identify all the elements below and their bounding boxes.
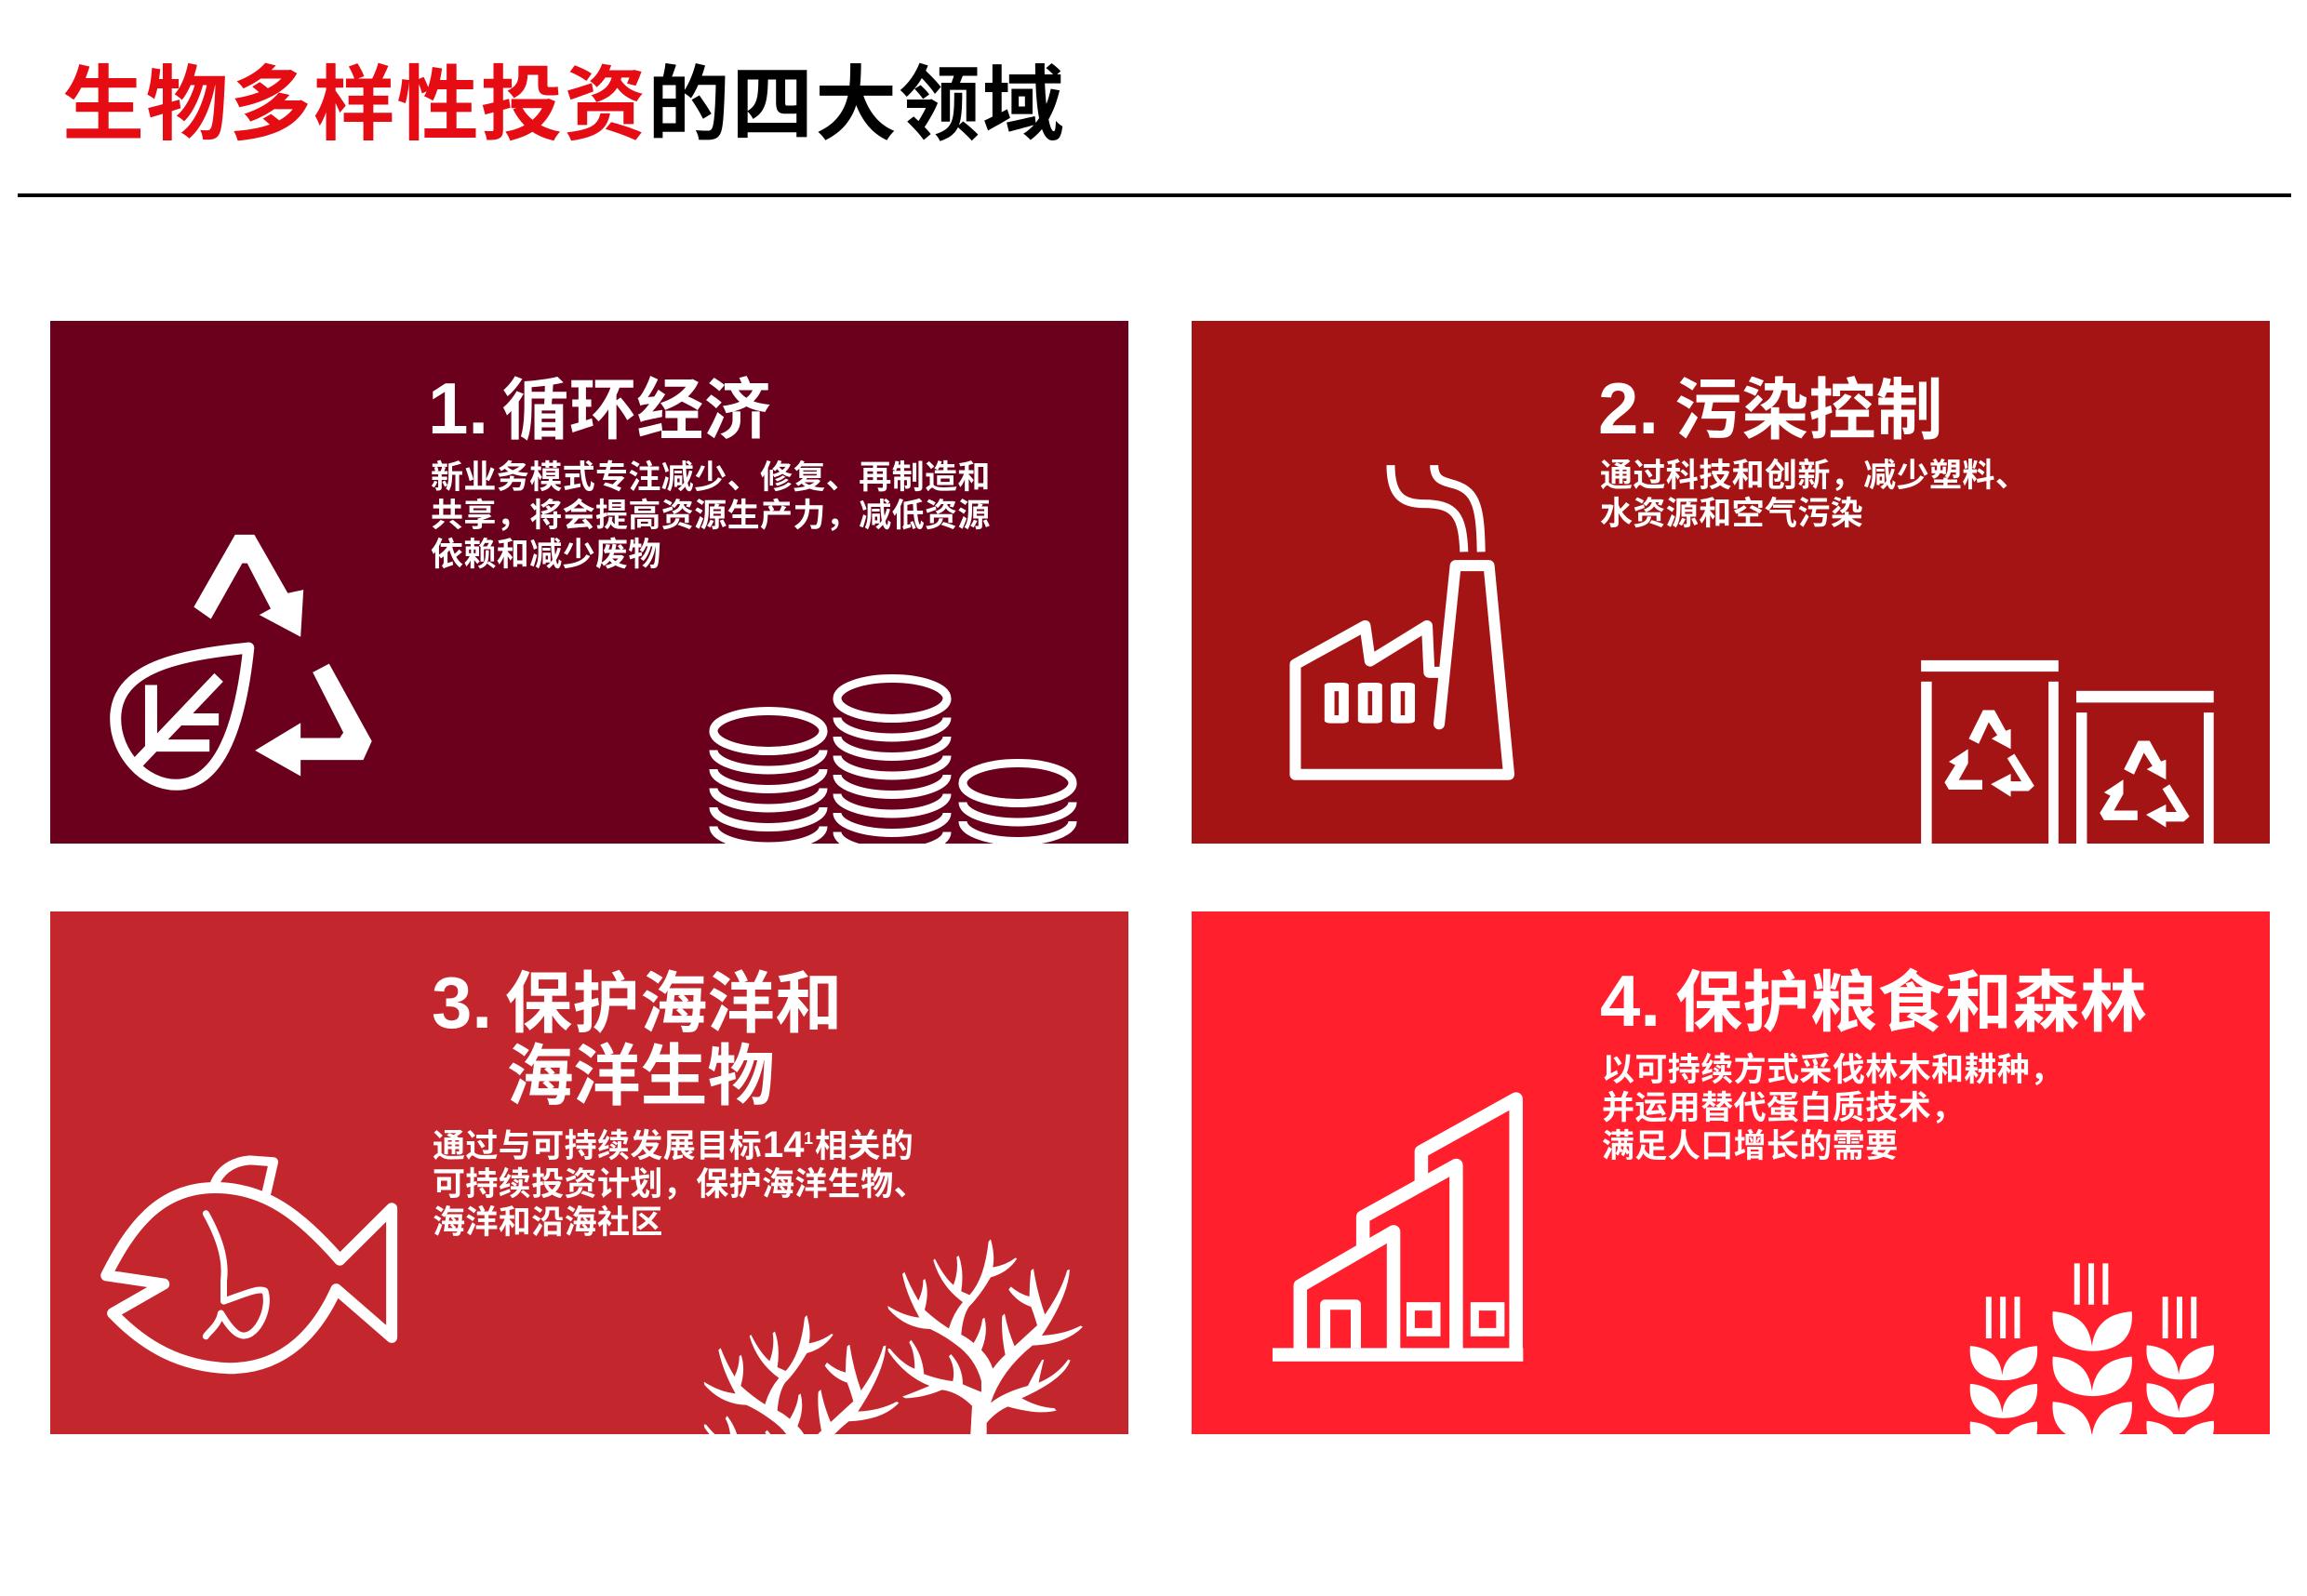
heading: oceans and marine life: 3. — [432, 962, 492, 1044]
heading: circular economy: 循环经济 — [502, 374, 771, 448]
icon: fish — [106, 1160, 392, 1368]
panel: food and forests — [1192, 911, 2270, 1456]
heading: oceans and marine life: 海洋生物 — [506, 1040, 775, 1114]
body text: oceans and marine life: 相关的 — [815, 1128, 913, 1164]
icon: recycling leaf — [115, 535, 372, 785]
body text: oceans and marine life: 14 — [763, 1124, 805, 1165]
body text: oceans and marine life: 可持续投资计划，保护海洋生物、 — [433, 1166, 927, 1203]
body text: circular economy: 新业务模式专注减少、修复、再制造和 — [431, 459, 991, 496]
body text: pollution control: 水资源和空气污染 — [1600, 496, 1863, 532]
body text: food and forests: 并运用替代蛋白质技术， — [1602, 1090, 1964, 1126]
body text: oceans and marine life: 1 — [804, 1129, 813, 1148]
body text: oceans and marine life: 通过与可持续发展目标 — [433, 1128, 762, 1164]
heading: pollution control: 污染控制 — [1674, 374, 1943, 448]
panel: circular economy — [50, 321, 1128, 852]
title: 生物多样性投资的四大领域 — [62, 59, 1066, 151]
body text: pollution control: 通过科技和创新，减少塑料、 — [1600, 458, 2028, 494]
icon: wheat — [1970, 1263, 2214, 1434]
heading: circular economy: 1. — [428, 367, 488, 449]
panel: pollution control — [1192, 321, 2270, 884]
body text: oceans and marine life: 海洋和沿海社区 — [433, 1204, 663, 1241]
heading: food and forests: 保护粮食和森林 — [1675, 966, 2148, 1041]
body text: circular economy: 共享，将会提高资源生产力，减低资源 — [431, 498, 991, 534]
icon: recycling bins — [1921, 660, 2214, 844]
body text: food and forests: 满足人口增长的需要 — [1602, 1128, 1899, 1164]
icon: coin stacks — [713, 679, 1073, 852]
body text: circular economy: 依赖和减少废物 — [431, 537, 661, 573]
panel: oceans and marine life — [50, 911, 1128, 1434]
heading: food and forests: 4. — [1600, 960, 1660, 1042]
icon: buildings — [1273, 1099, 1523, 1362]
icon: coral — [703, 1239, 1083, 1434]
heading: oceans and marine life: 保护海洋和 — [505, 967, 843, 1042]
heading: pollution control: 2. — [1598, 367, 1659, 449]
body text: food and forests: 以可持续方式采伐林木和耕种， — [1602, 1052, 2063, 1088]
icon: factory — [1295, 465, 1509, 775]
